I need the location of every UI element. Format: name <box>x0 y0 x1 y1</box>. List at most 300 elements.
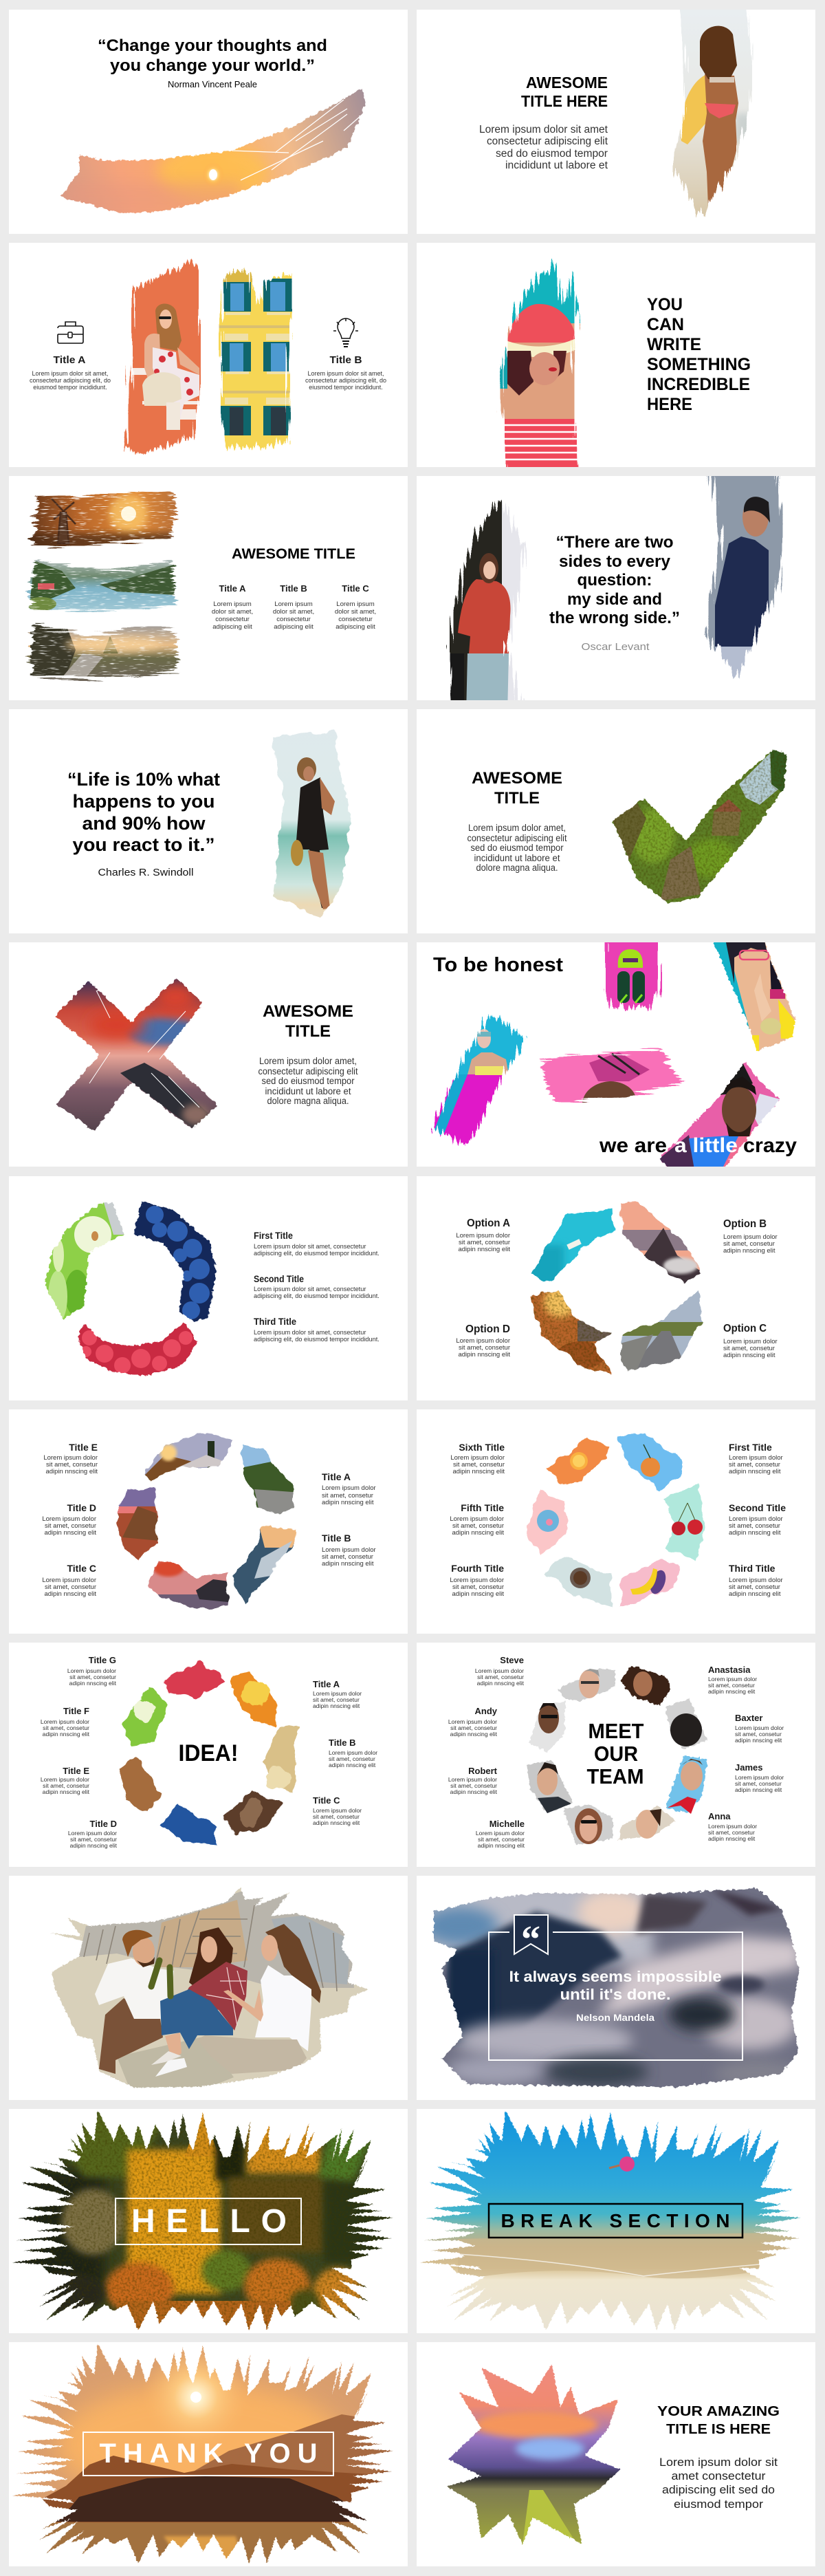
item: second title <box>254 1273 380 1299</box>
item: Anna: Lorem ipsum dolor <box>708 1823 757 1830</box>
item: option B: adipin nnscing elit <box>723 1247 776 1255</box>
icon: quote ribbon: “ <box>521 1918 540 1961</box>
item: option A <box>456 1217 510 1253</box>
title <box>263 1002 353 1041</box>
author: Charles R. Swindoll <box>98 867 194 878</box>
brush: road at sunrise <box>25 623 181 682</box>
heading: YOU <box>647 295 683 314</box>
item: fifth title: Fifth Title <box>461 1502 504 1513</box>
item: second title: sit amet, consetur <box>729 1522 780 1530</box>
quote: question: <box>578 571 652 589</box>
brush: tangerine on blue <box>618 1433 681 1491</box>
title <box>657 2404 780 2437</box>
panel: awesome title surfer <box>417 0 815 234</box>
panel: friends on the beach <box>9 1876 408 2100</box>
item: title C: Title C <box>67 1563 96 1574</box>
item: title B: adipin nnscing elit <box>329 1762 376 1768</box>
item: title D: Title D <box>89 1819 117 1829</box>
item: title B: adipin nnscing elit <box>322 1560 374 1568</box>
item: title C: Title C <box>313 1795 340 1806</box>
brush: surfer photo <box>672 10 754 217</box>
item: title A: Title A <box>322 1471 351 1482</box>
body text: sed do eiusmod tempor <box>496 148 608 160</box>
frame <box>489 2204 742 2238</box>
brush: coast sunset <box>225 1521 304 1609</box>
item: Steve: sit amet, consetur <box>477 1674 524 1680</box>
body: dolore magna aliqua. <box>476 863 558 873</box>
panel: fruit ring <box>9 1176 408 1400</box>
quote: you react to it.” <box>73 834 214 855</box>
item: title C: adipin nnscing elit <box>313 1819 360 1826</box>
item: fourth title: Fourth Title <box>451 1563 504 1574</box>
item: title C: sit amet, consetur <box>313 1813 360 1820</box>
item: title E: sit amet, consetur <box>43 1782 89 1789</box>
item: Anastasia: adipin nnscing elit <box>708 1688 756 1695</box>
item: title D: adipin nnscing elit <box>70 1842 118 1849</box>
heading: THANK YOU <box>99 2438 318 2469</box>
brush: green apples <box>38 1197 131 1328</box>
brush: sunset road <box>138 1426 237 1486</box>
item: first title: First Title <box>729 1442 772 1453</box>
column C: consectetur <box>338 616 373 623</box>
item: Robert: sit amet, consetur <box>450 1782 497 1789</box>
item: James: James <box>735 1762 762 1773</box>
item: option B: Lorem ipsum dolor <box>723 1233 778 1241</box>
brush: citrus <box>232 1671 278 1727</box>
item: Andy: adipin nnscing elit <box>450 1731 498 1738</box>
body: sed do eiusmod tempor <box>261 1076 355 1086</box>
item: fifth title: Lorem ipsum dolor <box>450 1515 504 1523</box>
portrait: Anastasia <box>621 1665 670 1706</box>
quote: until it's done. <box>560 1986 671 2003</box>
item: title C <box>313 1795 362 1826</box>
quote: It always seems impossible <box>509 1968 722 1985</box>
brush: aerial beach <box>417 2108 815 2333</box>
quote heading: you change your world.” <box>110 56 315 75</box>
heading: SOMETHING <box>647 355 751 374</box>
item: fifth title: sit amet, consetur <box>452 1522 504 1530</box>
item: title D: Title D <box>67 1502 96 1513</box>
brush: bay at dusk <box>141 1555 234 1614</box>
brush: woman in red hat <box>496 259 580 467</box>
item: Anastasia: sit amet, consetur <box>708 1682 755 1689</box>
brush: blueberries <box>160 1804 218 1845</box>
brush: woman with glasses <box>701 925 801 1056</box>
item: Robert: Lorem ipsum dolor <box>448 1776 497 1783</box>
body text: Lorem ipsum dolor sit amet <box>479 124 608 136</box>
body B <box>305 370 386 391</box>
portrait: James <box>666 1755 707 1814</box>
body A: Lorem ipsum dolor sit amet, <box>32 370 109 377</box>
brush highlights <box>89 991 199 1107</box>
item: title E: adipin nnscing elit <box>43 1788 90 1795</box>
item: third title: Lorem ipsum dolor sit amet, consectetur <box>254 1329 366 1336</box>
item: option C: Lorem ipsum dolor <box>723 1338 778 1345</box>
heading: AWESOME TITLE <box>232 546 355 562</box>
title: AWESOME <box>526 74 608 91</box>
heading: we are a little crazy: crazy <box>743 1134 797 1157</box>
item: first title: Lorem ipsum dolor sit amet, consectetur <box>254 1243 366 1250</box>
item: first title <box>254 1230 380 1257</box>
body: Lorem ipsum dolor amet, <box>259 1056 357 1066</box>
column B: Lorem ipsum <box>274 600 313 608</box>
item: James: Lorem ipsum dolor <box>735 1774 784 1781</box>
quote: “Life is 10% what <box>67 769 220 790</box>
panel: three landscapes <box>9 476 408 700</box>
brush: mountain sunset <box>9 2341 415 2566</box>
item: Michelle: adipin nnscing elit <box>478 1842 525 1849</box>
item: title A: adipin nnscing elit <box>322 1499 374 1506</box>
heading: we are a little crazy: a little <box>674 1134 738 1157</box>
title <box>521 74 608 110</box>
brush: woman in red sweater <box>443 492 529 715</box>
body A: eiusmod tempor incididunt. <box>33 384 107 391</box>
item: Steve: adipin nnscing elit <box>477 1680 525 1687</box>
body: consectetur adipiscing elit <box>258 1066 358 1076</box>
item: second title: adipin nnscing elit <box>729 1529 781 1537</box>
item: title A <box>322 1471 376 1506</box>
item: Michelle: sit amet, consetur <box>478 1836 525 1843</box>
item: James: sit amet, consetur <box>735 1780 782 1787</box>
item: third title <box>729 1563 783 1598</box>
item: option D <box>456 1323 510 1359</box>
author: Norman Vincent Peale <box>168 79 257 89</box>
item: title E: Title E <box>63 1766 89 1776</box>
body text <box>479 124 608 171</box>
heading: WRITE <box>647 335 701 354</box>
item: Baxter: adipin nnscing elit <box>735 1737 782 1744</box>
brush: lollipop on pink <box>526 1490 565 1555</box>
brush: almonds <box>120 1755 160 1812</box>
quote <box>549 533 680 627</box>
body A: consectetur adipiscing elit, do <box>30 377 111 384</box>
item: title B: sit amet, consetur <box>329 1755 375 1762</box>
item: option C: sit amet, consetur <box>723 1345 775 1352</box>
item: Robert <box>448 1766 498 1795</box>
item: Steve: Lorem ipsum dolor <box>475 1667 524 1674</box>
portrait: Michelle <box>563 1804 613 1845</box>
item: third title: adipiscing elit, do eiusmod tempor incididunt. <box>254 1336 380 1343</box>
item: fifth title: adipin nnscing elit <box>452 1529 504 1537</box>
item: fourth title: Lorem ipsum dolor <box>450 1577 504 1584</box>
column C: dolor sit amet, <box>335 608 376 616</box>
frame <box>489 1932 742 2060</box>
item: option D: adipin nnscing elit <box>458 1351 510 1359</box>
item: title C: Lorem ipsum dolor <box>42 1577 96 1584</box>
body: amet consectetur <box>671 2470 766 2482</box>
brush: desert cliff <box>113 1482 163 1565</box>
panel: meet our team <box>417 1643 815 1867</box>
heading: we are a little crazy <box>599 1134 797 1157</box>
item: title B: Title B <box>329 1738 356 1748</box>
heading <box>647 295 751 414</box>
item: title B <box>322 1533 376 1568</box>
column B: adipiscing elit <box>274 623 314 631</box>
column A: consectetur <box>215 616 250 623</box>
brush: pink shoes <box>598 925 663 1011</box>
brush: pine road <box>236 1440 301 1521</box>
item: title F: adipin nnscing elit <box>43 1731 90 1738</box>
item: Michelle: Michelle <box>490 1819 525 1829</box>
body B: consectetur adipiscing elit, do <box>305 377 386 384</box>
panel: life is 10 percent quote <box>9 709 408 933</box>
item: Baxter <box>735 1713 784 1744</box>
brush: raspberries <box>72 1317 203 1379</box>
brush: mountain lake <box>25 559 179 612</box>
item: Anastasia: Anastasia <box>708 1665 751 1675</box>
brush: sky and field <box>440 2356 626 2552</box>
panel: x mark <box>9 942 408 1167</box>
item: Anna: sit amet, consetur <box>708 1829 755 1836</box>
quote heading <box>98 36 327 75</box>
item: third title <box>254 1316 380 1343</box>
panel: your amazing title <box>417 2342 815 2566</box>
quote: my side and <box>567 590 662 609</box>
body: Lorem ipsum dolor sit <box>659 2456 778 2469</box>
item: second title: adipiscing elit, do eiusmod tempor incididunt. <box>254 1292 380 1299</box>
item: title D: adipin nnscing elit <box>44 1529 96 1537</box>
column A: Title A <box>219 583 246 594</box>
item: title F: Lorem ipsum dolor <box>41 1718 89 1725</box>
item: first title <box>729 1442 783 1475</box>
column A: adipiscing elit <box>212 623 252 631</box>
item: third title: sit amet, consetur <box>729 1583 780 1591</box>
item: title D: sit amet, consetur <box>70 1836 117 1843</box>
item: James: adipin nnscing elit <box>735 1786 782 1793</box>
heading: BREAK SECTION <box>500 2210 730 2231</box>
brush: cherries on mint <box>663 1485 705 1560</box>
title <box>472 769 562 808</box>
item: title E: Title E <box>69 1442 98 1453</box>
item: third title: Third Title <box>254 1316 296 1327</box>
item: option C <box>723 1323 778 1359</box>
heading: CAN <box>647 315 684 334</box>
item: title C: Lorem ipsum dolor <box>313 1807 362 1814</box>
body: dolore magna aliqua. <box>267 1096 349 1106</box>
brush: smiling man <box>653 1056 784 1176</box>
center heading: MEET <box>588 1719 644 1743</box>
item: first title: adipiscing elit, do eiusmod tempor incididunt. <box>254 1250 380 1257</box>
item: option A: adipin nnscing elit <box>458 1246 510 1253</box>
item: title A: sit amet, consetur <box>322 1492 373 1500</box>
column C <box>335 583 376 631</box>
icon: light bulb <box>333 318 358 347</box>
item: Michelle: Lorem ipsum dolor <box>476 1830 525 1837</box>
item: James <box>735 1762 784 1793</box>
item: Andy: sit amet, consetur <box>450 1724 497 1731</box>
body text: consectetur adipiscing elit <box>487 136 608 147</box>
item: title G: adipin nnscing elit <box>69 1680 117 1687</box>
body <box>258 1056 358 1106</box>
frame <box>83 2432 333 2476</box>
item: title A: Lorem ipsum dolor <box>322 1484 376 1492</box>
brush: banana on pink <box>621 1560 681 1606</box>
portrait: Anna <box>618 1806 676 1840</box>
item: title A: sit amet, consetur <box>313 1696 360 1703</box>
center heading: OUR <box>594 1742 638 1766</box>
author: Oscar Levant <box>582 641 650 653</box>
item: title F: Title F <box>63 1706 89 1716</box>
item: third title: Third Title <box>729 1563 776 1574</box>
brush: mountain peak <box>615 1197 708 1290</box>
brush: woman on magenta <box>426 1008 529 1152</box>
item: Andy: Lorem ipsum dolor <box>448 1718 497 1725</box>
brush: x mark sunset <box>48 973 227 1138</box>
item: first title: adipin nnscing elit <box>729 1468 781 1475</box>
brush: orange slice <box>547 1438 610 1485</box>
panel: thank you <box>9 2341 415 2566</box>
panel: four options ring <box>417 1176 815 1400</box>
item: title E <box>41 1766 90 1795</box>
brush: apples <box>122 1687 168 1746</box>
quote <box>509 1968 722 2003</box>
icon: quote ribbon <box>514 1915 548 1961</box>
item: second title <box>729 1502 786 1537</box>
heading: INCREDIBLE <box>647 375 750 394</box>
panel: break section <box>417 2108 815 2333</box>
brush: yellow building <box>219 268 293 451</box>
brush: woman on orange wall <box>124 259 201 455</box>
item: Anna: adipin nnscing elit <box>708 1835 756 1842</box>
item: option A: Lorem ipsum dolor <box>456 1232 510 1240</box>
item: option B <box>723 1218 778 1255</box>
body: adipiscing elit sed do <box>662 2484 775 2496</box>
body: consectetur adipiscing elit <box>468 833 567 843</box>
brush: blueberries <box>131 1197 223 1328</box>
column B: Title B <box>280 583 307 594</box>
column C: Title C <box>342 583 369 594</box>
title: AWESOME <box>263 1002 353 1021</box>
panel: change your thoughts quote <box>9 10 408 234</box>
center heading <box>587 1719 644 1788</box>
item: title B <box>329 1738 377 1768</box>
brush: autumn forest <box>9 2108 408 2335</box>
item: Baxter: Lorem ipsum dolor <box>735 1724 784 1731</box>
brush: check mark landscape <box>605 743 794 908</box>
icon: pink float <box>609 2156 635 2172</box>
title B: Title B <box>330 354 362 366</box>
item: title B: sit amet, consetur <box>322 1553 373 1561</box>
title: YOUR AMAZING <box>657 2404 780 2419</box>
brush streaks <box>232 100 371 180</box>
brush: autumn forest <box>522 1283 619 1379</box>
portrait: Steve <box>558 1669 615 1702</box>
item: title F <box>41 1706 90 1738</box>
item: first title: sit amet, consetur <box>729 1461 780 1469</box>
item: second title: Second Title <box>729 1502 786 1513</box>
item: option D: Lorem ipsum dolor <box>456 1337 510 1345</box>
item: Baxter: Baxter <box>735 1713 762 1723</box>
brush: turquoise sea <box>522 1200 622 1290</box>
item: title G: Lorem ipsum dolor <box>67 1667 116 1674</box>
item: title B: Title B <box>322 1533 351 1544</box>
item: fourth title: sit amet, consetur <box>452 1583 504 1591</box>
brush: clouds photo <box>423 1881 808 2095</box>
column B: dolor sit amet, <box>273 608 314 616</box>
panel: five landscape ring <box>9 1409 408 1634</box>
frame <box>116 2198 301 2244</box>
item: first title: Lorem ipsum dolor <box>729 1454 783 1462</box>
column B: consectetur <box>276 616 311 623</box>
item: option A: Option A <box>467 1217 510 1229</box>
brush: coffee on grey <box>544 1557 613 1606</box>
brush: woman on the beach <box>261 722 358 925</box>
item: title A <box>313 1679 362 1709</box>
brush: potatoes <box>263 1725 297 1791</box>
center heading: TEAM <box>587 1764 644 1788</box>
item: first title: First Title <box>254 1230 293 1241</box>
panel: to be honest <box>417 925 815 1176</box>
body: incididunt ut labore et <box>474 853 560 863</box>
item: Steve <box>475 1655 525 1687</box>
brush: pink head <box>533 1042 691 1107</box>
panel: title A and title B <box>9 243 408 467</box>
item: Robert: Robert <box>468 1766 498 1776</box>
item: Anna <box>708 1811 757 1842</box>
item: Baxter: sit amet, consetur <box>735 1731 782 1738</box>
title: AWESOME <box>472 769 562 788</box>
body: Lorem ipsum dolor amet, <box>468 823 566 833</box>
title A: Title A <box>54 354 86 366</box>
panel: six pastel fruits ring <box>417 1409 815 1634</box>
brush: coffee beans <box>223 1791 281 1834</box>
item: sixth title <box>450 1442 505 1475</box>
body: sed do eiusmod tempor <box>470 843 564 853</box>
item: title G: Title G <box>89 1655 116 1665</box>
item: option B: sit amet, consetur <box>723 1240 775 1248</box>
column C: Lorem ipsum <box>336 600 375 608</box>
heading: we are a little crazy: we are <box>599 1134 667 1157</box>
panel: idea ring <box>9 1643 408 1867</box>
portrait: Robert <box>526 1761 573 1813</box>
item: Anastasia: Lorem ipsum dolor <box>708 1676 757 1682</box>
brush: sunset stroke <box>60 89 366 213</box>
item: second title: Lorem ipsum dolor sit amet, consectetur <box>254 1286 366 1292</box>
item: title E: adipin nnscing elit <box>45 1468 98 1475</box>
item: third title: Lorem ipsum dolor <box>729 1577 783 1584</box>
portrait: Andy <box>529 1702 565 1752</box>
item: Michelle <box>476 1819 525 1849</box>
column A: Lorem ipsum <box>213 600 252 608</box>
item: second title: Second Title <box>254 1273 304 1284</box>
item: title D: sit amet, consetur <box>45 1522 96 1530</box>
panel: you can write something <box>417 243 815 485</box>
item: title G <box>67 1655 117 1687</box>
icon: briefcase <box>58 322 83 343</box>
panel: two sides quote <box>417 461 815 715</box>
brush: beach photo <box>45 1881 375 2095</box>
item: Anna: Anna <box>708 1811 731 1821</box>
column A: dolor sit amet, <box>212 608 253 616</box>
heading: HERE <box>647 395 692 414</box>
item: title F: sit amet, consetur <box>43 1724 89 1731</box>
body: incididunt ut labore et <box>265 1086 351 1096</box>
item: title E: sit amet, consetur <box>46 1461 98 1469</box>
body <box>468 823 567 873</box>
body B: Lorem ipsum dolor sit amet, <box>307 370 384 377</box>
item: sixth title: Lorem ipsum dolor <box>450 1454 505 1462</box>
item: title E: Lorem ipsum dolor <box>41 1776 89 1783</box>
title: TITLE <box>285 1022 331 1041</box>
body A <box>30 370 111 391</box>
item: title E: Lorem ipsum dolor <box>43 1454 98 1462</box>
title: TITLE HERE <box>521 92 608 110</box>
center label: IDEA! <box>179 1740 238 1766</box>
body <box>659 2456 778 2511</box>
panel: it always seems impossible <box>417 1876 815 2100</box>
heading: to be honest: To be honest <box>433 954 563 976</box>
column A <box>212 583 253 631</box>
